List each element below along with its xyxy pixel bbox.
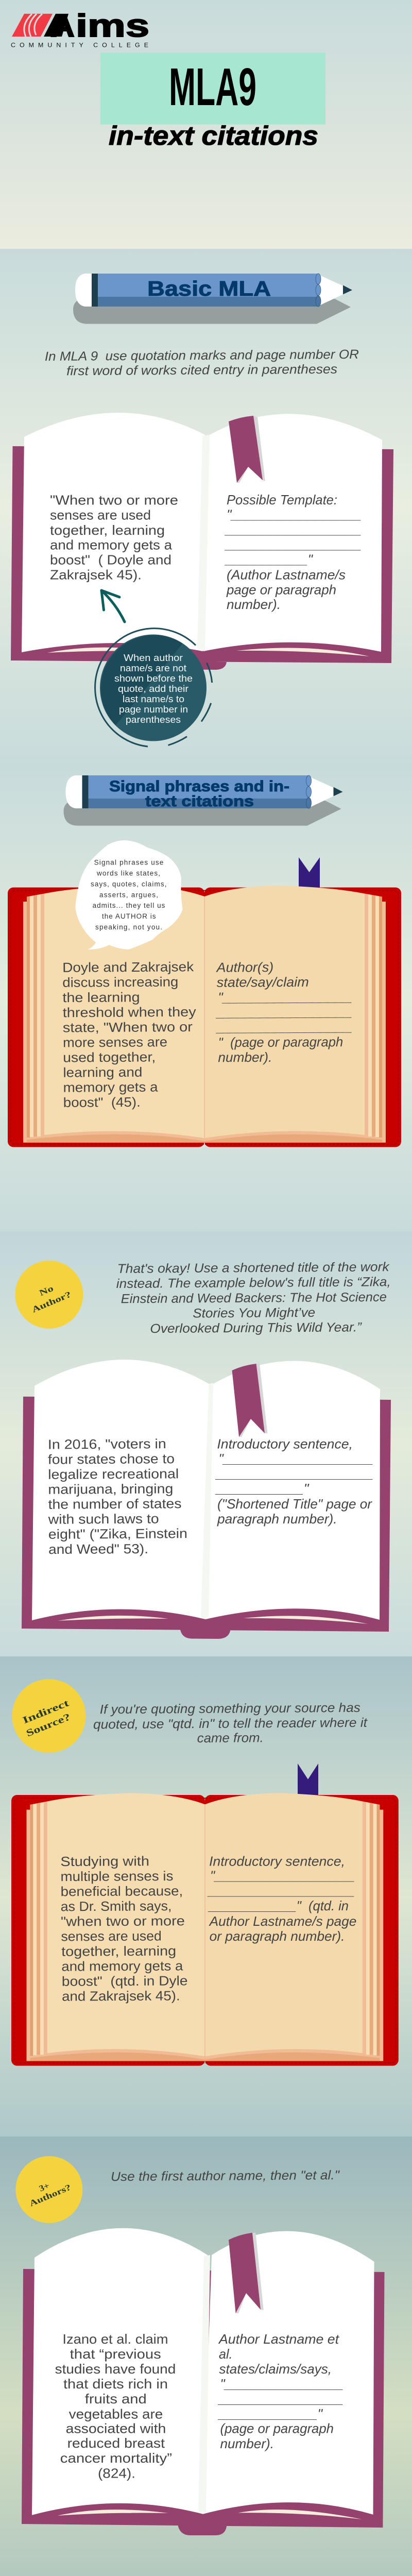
text: possible template: number). (227, 597, 281, 612)
text: indirect source template: ____________" (qtd. in (208, 1898, 349, 1913)
text: signal phrase template: __________________ (215, 1004, 352, 1020)
text: three or more authors template: _____________" (217, 2406, 323, 2421)
pencil heading: signal phrases: Signal phrases and in- (109, 778, 289, 795)
ribbon bookmark (229, 416, 265, 483)
text: signal phrase template (215, 959, 352, 1065)
text: no author template: _____________________ (215, 1466, 373, 1481)
ribbon bookmark (229, 2233, 264, 2313)
panel: red book 2 (11, 1793, 399, 2066)
text: three or more authors template: number). (220, 2436, 274, 2451)
callout: author names circle: quote, add their (118, 683, 188, 694)
text: indirect source example: together, learning (61, 1943, 176, 1959)
text: three or more authors template: _________________ (217, 2391, 344, 2406)
callout: signal phrases speech bubble: asserts, argues, (99, 891, 158, 899)
callout: signal phrases speech bubble: admits... they tell us (93, 902, 165, 909)
subtitle: in-text citations (109, 121, 318, 151)
logo: Aims Community College: ims (76, 8, 149, 44)
text: three or more authors example: studies have found (55, 2361, 176, 2377)
text: no author template: paragraph number). (217, 1511, 337, 1527)
logo: Aims Community College (11, 8, 149, 48)
text: signal phrase example: Doyle and Zakrajsek (62, 959, 194, 975)
text: possible template: (Author Lastname/s (227, 567, 346, 582)
text: possible template: page or paragraph (226, 582, 336, 598)
text: signal phrase example: state, "When two or (63, 1019, 193, 1035)
badge: No Author?: Author? (30, 1289, 73, 1315)
panel: purple book 2 (22, 1360, 391, 1639)
text: no author example: four states chose to (48, 1451, 175, 1467)
text: indirect source example: as Dr. Smith says, (61, 1898, 172, 1914)
text: three or more authors example: Izano et al. claim (62, 2331, 168, 2347)
intro text: basic MLA (45, 347, 359, 379)
badge: Indirect Source?: Indirect (21, 1698, 71, 1726)
intro text: no author: That's okay! Use a shortened title of the work (117, 1260, 390, 1276)
text: three or more authors example: cancer mortality” (60, 2450, 172, 2466)
text: example quote: and memory gets a (50, 537, 173, 553)
badge: 3+ Authors?: 3+ (38, 2180, 51, 2194)
ribbon bookmark (232, 1364, 267, 1437)
text: no author template: Introductory sentence, (217, 1436, 353, 1452)
text: signal phrase example: more senses are (63, 1034, 167, 1050)
intro text: basic MLA: first word of works cited entry in parentheses (66, 362, 337, 378)
text: no author example: marijuana, bringing (48, 1481, 173, 1497)
callout: signal phrases speech bubble (75, 840, 183, 950)
text: no author template (215, 1436, 373, 1527)
text: possible template (224, 492, 362, 612)
intro text: no author: Overlooked During This Wild Year.” (150, 1320, 363, 1336)
text: indirect source template: "___________________ (210, 1868, 355, 1884)
icon: purple bookmark (298, 1764, 318, 1796)
text: example quote (50, 493, 178, 582)
text: three or more authors example: associated with (66, 2420, 166, 2436)
text: no author example: with such laws to (48, 1511, 159, 1527)
text: signal phrase example: the learning (62, 989, 140, 1005)
callout: signal phrases speech bubble: says, quotes, claims, (91, 880, 167, 888)
callout: signal phrases speech bubble: Signal phrases use (94, 859, 163, 867)
pencil heading: signal phrases (64, 775, 343, 826)
text: example quote: boost" ( Doyle and (50, 552, 171, 567)
text: no author example: and Weed" 53). (48, 1541, 148, 1557)
text: signal phrase template: " (page or paragraph (218, 1034, 343, 1050)
text: three or more authors example: that diets rich in (63, 2376, 168, 2392)
title box (100, 53, 325, 125)
badge: No Author? (15, 1261, 83, 1329)
text: possible template: Possible Template: (227, 492, 337, 507)
text: three or more authors template: Author Lastname et (218, 2331, 340, 2347)
intro text: indirect source: quoted, use "qtd. in" to tell the reader where it (93, 1716, 368, 1732)
text: signal phrase example (62, 959, 197, 1110)
badge: 3+ Authors? (15, 2156, 82, 2223)
text: indirect source example (60, 1853, 188, 2004)
text: three or more authors example: that “previous (70, 2346, 161, 2362)
text: no author example (47, 1436, 187, 1557)
intro text: basic MLA: In MLA 9 use quotation marks and page number OR (45, 347, 359, 364)
text: indirect source example: senses are used (61, 1928, 162, 1944)
intro text: indirect source (93, 1701, 368, 1746)
text: no author example: legalize recreational (48, 1466, 179, 1482)
text: no author example: In 2016, "voters in (48, 1436, 166, 1452)
text: no author template: ___________" (215, 1481, 310, 1496)
text: three or more authors template (217, 2331, 344, 2451)
logo: Aims Community College: A (50, 8, 75, 44)
text: example quote: Zakrajsek 45). (50, 567, 142, 582)
pencil heading: Basic MLA: Basic MLA (147, 277, 271, 300)
badge: Indirect Source?: Source? (25, 1711, 72, 1739)
text: indirect source template (207, 1853, 356, 1944)
title box: MLA9 (169, 57, 256, 116)
pencil heading: Basic MLA (73, 274, 352, 324)
text: no author template: ("Shortened Title" page or (217, 1496, 372, 1512)
text: indirect source template: Author Lastname/s page (209, 1913, 356, 1929)
text: indirect source example: and Zakrajsek 45). (62, 1988, 180, 2004)
callout: author names circle: parentheses (126, 714, 181, 725)
text: signal phrase example: used together, (63, 1049, 156, 1065)
text: signal phrase template: state/say/claim (217, 974, 309, 990)
text: possible template: __________________ (224, 521, 362, 537)
text: three or more authors example: reduced breast (67, 2435, 165, 2451)
callout: signal phrases speech bubble: the AUTHOR is (102, 912, 156, 920)
text: indirect source example: beneficial because, (61, 1883, 183, 1899)
text: example quote: "When two or more (50, 493, 178, 508)
badge: 3+ Authors?: Authors? (28, 2182, 73, 2208)
pencil heading: signal phrases: text citations (145, 793, 254, 810)
text: signal phrase template: __________________ (215, 1019, 352, 1035)
text: example quote: together, learning (50, 522, 165, 538)
intro text: no author (116, 1260, 391, 1336)
callout: author names circle: last name/s to (123, 693, 184, 704)
text: signal phrase example: boost" (45). (63, 1094, 141, 1110)
callout: author names circle: page number in (119, 704, 188, 715)
arrow: callout to citation (101, 590, 125, 622)
text: indirect source example: and memory gets a (61, 1958, 183, 1974)
callout: signal phrases speech bubble: words like states, (96, 870, 160, 877)
intro text: three or more authors: Use the first author name, then "et al." (111, 2168, 340, 2184)
text: three or more authors example: (824). (98, 2466, 135, 2481)
text: indirect source example: boost" (qtd. in Dyle (62, 1973, 188, 1989)
callout: author names circle: shown before the (114, 673, 193, 684)
text: example quote: senses are used (50, 507, 151, 523)
panel: red book 1 (8, 886, 401, 1147)
text: three or more authors example: fruits and (85, 2391, 147, 2406)
panel: purple book 3 (22, 2228, 384, 2535)
callout: author names circle (95, 629, 212, 747)
text: signal phrase example: threshold when they (63, 1004, 196, 1020)
text: signal phrase template: "_________________ (218, 989, 352, 1005)
intro text: no author: Stories You Might’ve (193, 1306, 315, 1320)
text: indirect source example: multiple senses is (60, 1868, 174, 1884)
icon: purple bookmark (299, 857, 320, 888)
text: three or more authors example (55, 2331, 176, 2481)
text: three or more authors template: (page or paragraph (220, 2420, 334, 2436)
text: possible template: __________________ (224, 537, 362, 552)
text: signal phrase example: learning and (63, 1064, 142, 1080)
text: three or more authors template: states/claims/says, (219, 2361, 332, 2377)
callout: author names circle: name/s are not (120, 663, 186, 673)
text: signal phrase template: number). (218, 1049, 272, 1065)
text: no author template: "____________________ (218, 1451, 373, 1466)
callout: author names circle: When author (124, 652, 183, 663)
logo: Aims Community College: COMMUNITY COLLEGE (11, 41, 148, 48)
intro text: no author: instead. The example below's full title is “Zika, (116, 1275, 391, 1291)
panel: purple book 1 (11, 413, 393, 670)
text: three or more authors template: al. (219, 2346, 233, 2362)
text: signal phrase example: discuss increasing (62, 974, 178, 990)
text: indirect source template: or paragraph number). (210, 1928, 345, 1944)
text: three or more authors template: "________________ (220, 2376, 344, 2392)
text: indirect source example: "when two or more (61, 1913, 185, 1929)
callout: signal phrases speech bubble: speaking, not you. (95, 923, 162, 931)
text: no author example: eight" ("Zika, Einstein (48, 1526, 187, 1542)
text: indirect source example: Studying with (60, 1853, 149, 1869)
text: indirect source template: Introductory sentence, (209, 1853, 345, 1869)
text: possible template: ___________" (224, 551, 314, 567)
text: no author example: the number of states (48, 1496, 182, 1512)
text: signal phrase template: Author(s) (215, 959, 273, 975)
text: three or more authors example: vegetables are (69, 2406, 163, 2421)
text: possible template: "_________________ (227, 507, 362, 522)
text: signal phrase example: memory gets a (63, 1079, 158, 1095)
text: indirect source template: ___________________ (207, 1883, 355, 1899)
intro text: indirect source: If you're quoting something your source has (100, 1701, 360, 1717)
intro text: no author: Einstein and Weed Backers: The Hot Science (121, 1290, 387, 1306)
intro text: indirect source: came from. (197, 1731, 264, 1745)
badge: No Author?: No (38, 1283, 55, 1298)
badge: Indirect Source? (12, 1679, 85, 1753)
